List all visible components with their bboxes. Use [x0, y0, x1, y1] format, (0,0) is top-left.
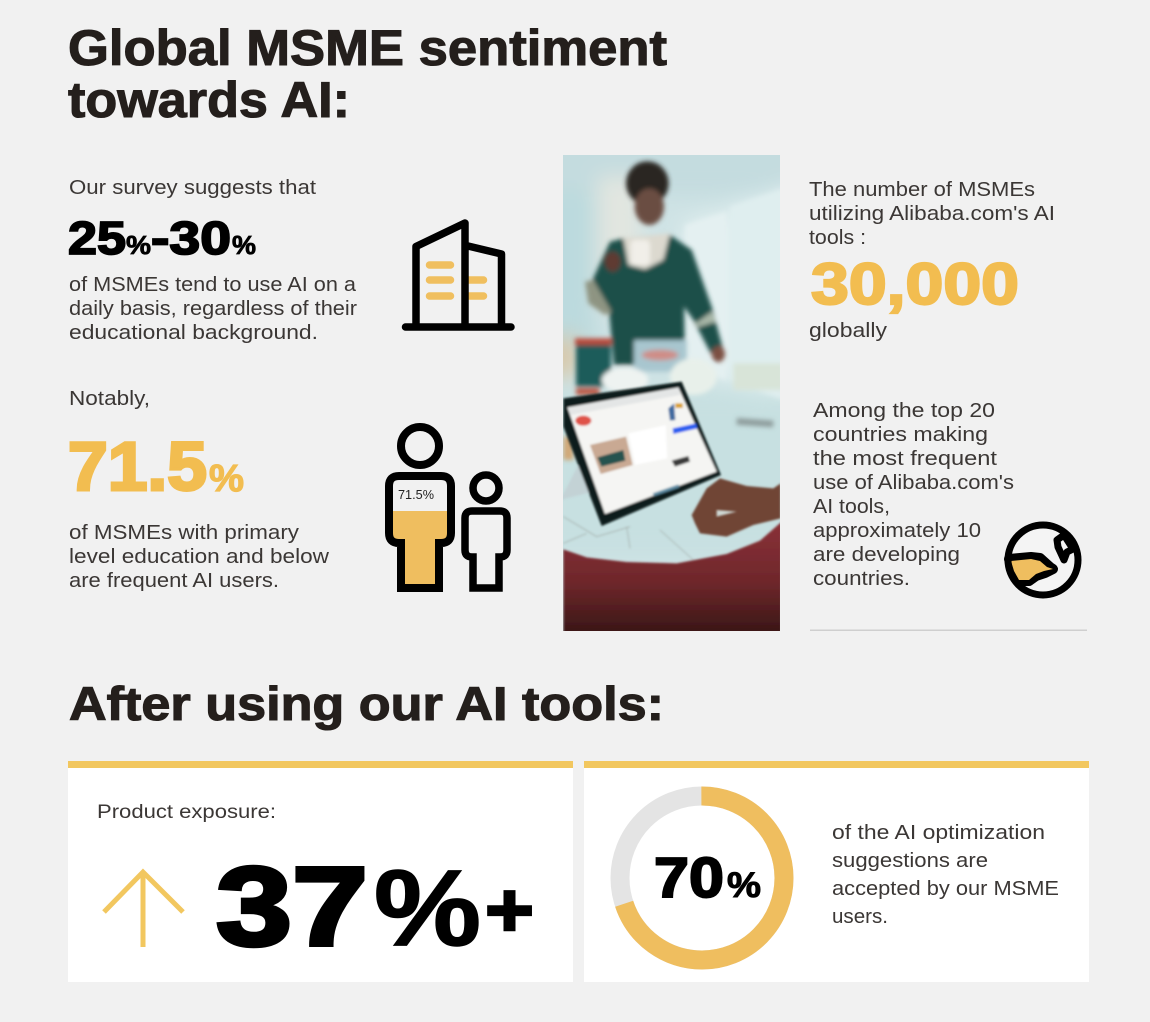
text block: 30,000 MSMEs: utilizing Alibaba.com's AI [809, 203, 1055, 225]
text block: 30,000 MSMEs [809, 179, 1055, 342]
text: accepted suggestions: users. [832, 906, 888, 928]
photo background blur [563, 155, 780, 388]
title: towards AI: [68, 72, 350, 128]
icon: globe [1008, 525, 1078, 595]
text block: primary education users: level education and below [69, 546, 330, 568]
text block: primary education users [68, 388, 330, 592]
photo: blurred person [563, 161, 774, 460]
text block: developing countries: the most frequent [813, 448, 998, 470]
text block: daily AI use: -30 [151, 212, 231, 264]
text block: developing countries: countries making [813, 424, 988, 446]
photo: red sleeve [563, 522, 782, 633]
text block: 30,000 MSMEs: 30,000 [811, 252, 1019, 317]
icon: adult and child figures with 71.5% fill [389, 427, 507, 588]
text: accepted suggestions: accepted by our MSME [832, 878, 1059, 900]
text block: 30,000 MSMEs: tools : [809, 227, 866, 249]
stat: 37%+: 37 [216, 844, 368, 969]
stat: 37%+: + [485, 868, 534, 953]
label: product exposure: Product exposure: [97, 802, 276, 823]
divider [810, 630, 1087, 631]
text block: daily AI use: educational background. [69, 322, 318, 344]
text block: primary education users: % [209, 458, 244, 500]
donut chart: 70% [620, 796, 784, 960]
text block: primary education users: 71.5 [68, 428, 207, 505]
text block: daily AI use: % [232, 230, 256, 260]
donut chart: 70%: % [727, 866, 761, 905]
text block: 30,000 MSMEs: globally [809, 320, 887, 342]
text block: primary education users: are frequent AI users. [69, 570, 279, 592]
text block: daily AI use: of MSMEs tend to use AI on a [69, 274, 357, 296]
heading: after using our AI tools: After using our AI tools: [69, 677, 664, 730]
donut chart: 70%: 70 [654, 846, 724, 910]
text block: daily AI use: % [126, 230, 151, 260]
panel: optimization suggestions [584, 761, 1089, 982]
text block: developing countries: countries. [813, 568, 910, 590]
icon: adult and child figures with 71.5% fill: 71.5% [398, 487, 434, 502]
text block: daily AI use: 25 [68, 212, 126, 264]
text block: primary education users: of MSMEs with primary [69, 522, 299, 544]
text block: daily AI use: Our survey suggests that [69, 177, 316, 199]
stat: 37%+: % [374, 847, 481, 968]
photo: hand [692, 478, 781, 537]
icon: up arrow [104, 872, 183, 947]
text block: daily AI use [68, 177, 357, 344]
photo: marble veins [563, 517, 693, 560]
text block: 30,000 MSMEs: The number of MSMEs [809, 179, 1035, 201]
photo: tablet [560, 382, 721, 526]
text: accepted suggestions [832, 822, 1059, 928]
photo: person and tablet at a table [563, 155, 780, 631]
text: accepted suggestions: suggestions are [832, 850, 988, 872]
text block: developing countries: Among the top 20 [813, 400, 995, 422]
text block: primary education users: Notably, [69, 388, 150, 410]
text block: developing countries [813, 400, 1014, 590]
text block: developing countries: approximately 10 [813, 520, 981, 542]
text: accepted suggestions: of the AI optimization [832, 822, 1045, 844]
text block: developing countries: use of Alibaba.com's [813, 472, 1014, 494]
text block: daily AI use: daily basis, regardless of their [69, 298, 357, 320]
title: Global MSME sentiment [68, 20, 667, 76]
icon: office building [406, 223, 511, 327]
panel: product exposure [68, 761, 573, 982]
title [68, 20, 667, 128]
text block: developing countries: AI tools, [813, 496, 890, 518]
text block: developing countries: are developing [813, 544, 960, 566]
stat: 37%+ [216, 844, 534, 969]
